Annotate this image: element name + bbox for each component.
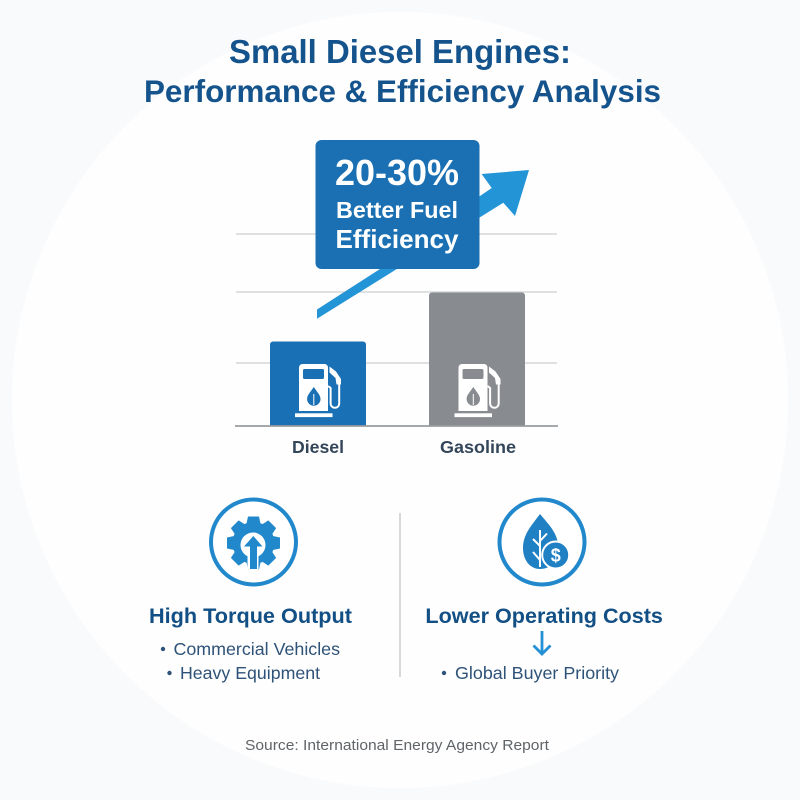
icon: leaf with dollar coin	[500, 500, 584, 584]
panel: lower operating costs	[425, 500, 663, 683]
trend arrow	[317, 170, 529, 319]
heading: high torque output: High Torque Output	[149, 604, 352, 628]
bar label: gasoline: Gasoline	[440, 437, 516, 457]
list: global priority: Global Buyer Priority	[455, 663, 619, 683]
list: torque uses	[161, 639, 340, 683]
icon: diesel fuel pump	[295, 364, 341, 417]
callout: fuel efficiency: Better Fuel	[336, 197, 458, 223]
icon: gasoline fuel pump	[454, 364, 500, 417]
callout: fuel efficiency: 20-30%	[335, 152, 459, 193]
icon: leaf with dollar coin: $	[551, 546, 561, 566]
heading: lower operating costs: Lower Operating Costs	[425, 604, 663, 628]
icon: gear with up arrow	[211, 500, 296, 584]
bar label: diesel: Diesel	[292, 437, 344, 457]
list: torque uses: Heavy Equipment	[180, 663, 320, 683]
panel: high torque	[149, 500, 352, 683]
source note: Source: International Energy Agency Report	[245, 737, 550, 754]
title: Performance & Efficiency Analysis	[144, 74, 661, 109]
bar chart	[235, 170, 558, 457]
icon: down arrow	[534, 631, 550, 654]
bar: diesel	[270, 342, 366, 426]
title	[144, 33, 661, 109]
list: torque uses: Commercial Vehicles	[174, 639, 340, 659]
callout: fuel efficiency	[316, 140, 480, 269]
bar: gasoline	[429, 292, 525, 426]
callout: fuel efficiency: Efficiency	[336, 224, 459, 254]
title: Small Diesel Engines:	[229, 33, 571, 70]
